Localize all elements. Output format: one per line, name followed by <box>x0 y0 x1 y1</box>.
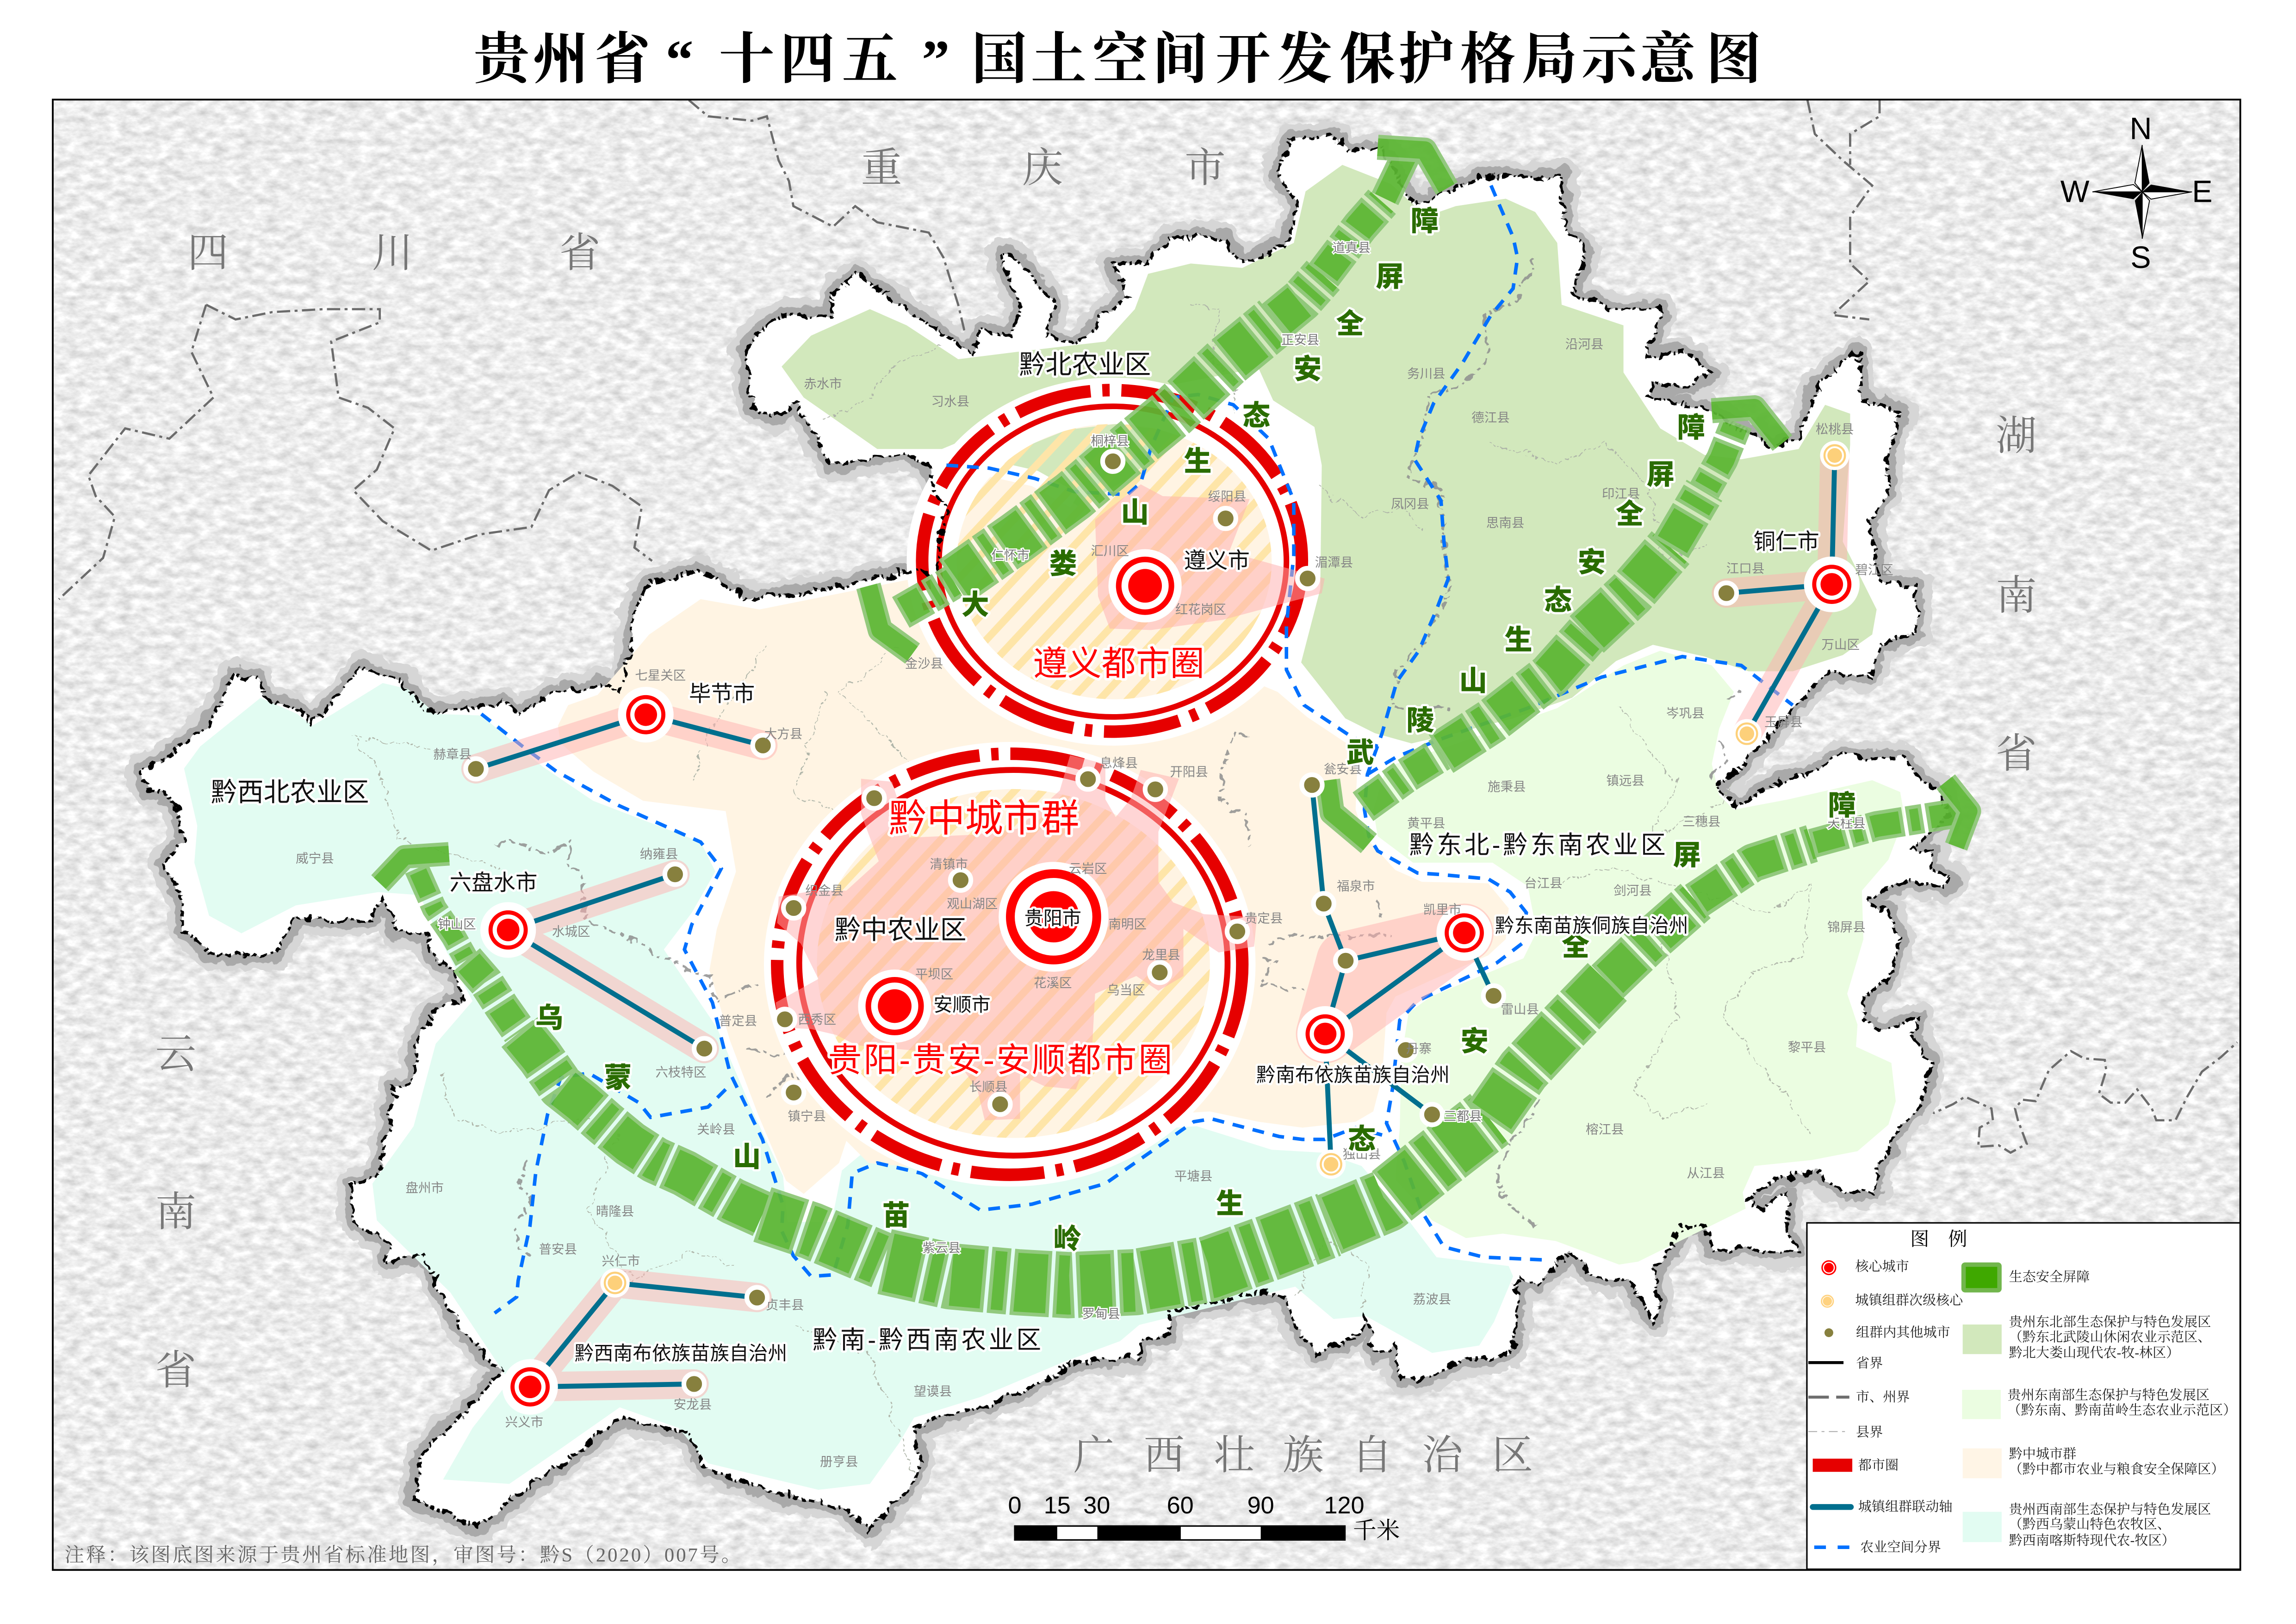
county name labels: 玉屏县 <box>1764 715 1803 729</box>
county name labels: 贞丰县 <box>766 1298 804 1312</box>
legend text: 市、州界 <box>1856 1389 1910 1405</box>
neighbouring province boundaries <box>59 100 2237 1153</box>
county labels over barrier bands: 正安县 <box>1281 333 1319 347</box>
legend text: 农业空间分界 <box>1860 1540 1941 1555</box>
urban cluster linkage halos <box>476 455 1835 1387</box>
county labels over barrier bands: 三都县 <box>1444 1109 1482 1123</box>
county name labels: 黄平县 <box>1407 816 1446 830</box>
barrier name characters: 山 <box>1121 497 1149 528</box>
county name labels: 思南县 <box>1486 516 1524 530</box>
county name labels: 瓮安县 <box>1324 762 1362 776</box>
region and city labels: 黔东南苗族侗族自治州 <box>1495 915 1688 936</box>
metropolitan circle labels: 贵阳-贵安-安顺都市圈 <box>828 1042 1172 1079</box>
county name labels: 兴义市 <box>505 1415 543 1429</box>
county name labels: 长顺县 <box>969 1079 1007 1094</box>
zone: southeast agricultural area <box>1373 651 1905 1264</box>
neighbouring province names: 重 <box>861 146 902 191</box>
county name labels: 兴仁市 <box>602 1254 640 1268</box>
neighbouring province names: 西 <box>1144 1433 1185 1478</box>
region and city labels: 黔南布依族苗族自治州 <box>1256 1064 1450 1086</box>
county name labels: 江口县 <box>1726 561 1764 575</box>
county name labels: 三穗县 <box>1682 815 1720 829</box>
county name labels: 红花岗区 <box>1175 602 1226 616</box>
county name labels: 大方县 <box>764 727 802 741</box>
neighbouring province names: 区 <box>1492 1433 1533 1478</box>
legend text: 核心城市 <box>1855 1259 1909 1274</box>
county name labels: 镇宁县 <box>788 1109 826 1123</box>
scale bar: 千米 <box>1353 1518 1400 1543</box>
county name labels: 德江县 <box>1471 410 1510 424</box>
barrier name characters: 安 <box>1461 1026 1489 1057</box>
source note: 注释：该图底图来源于贵州省标准地图，审图号：黔S（2020）007号。 <box>64 1544 741 1566</box>
barrier name characters: 岭 <box>1054 1224 1081 1255</box>
secondary core city markers <box>601 441 1849 1298</box>
region and city labels: 遵义市 <box>1184 548 1250 573</box>
barrier name characters: 屏 <box>1673 840 1701 871</box>
neighbouring province names: 自 <box>1352 1433 1392 1478</box>
compass <box>2060 112 2213 275</box>
legend text: （黔东北武陵山休闲农业示范区、 <box>2009 1330 2211 1345</box>
county name labels: 南明区 <box>1108 917 1147 931</box>
barrier name characters: 全 <box>1336 308 1364 339</box>
county name labels: 独山县 <box>1343 1147 1381 1161</box>
neighbouring province names: 治 <box>1422 1433 1464 1478</box>
region and city labels: 六盘水市 <box>450 871 537 896</box>
barrier name characters: 态 <box>1544 585 1572 616</box>
region and city labels: 铜仁市 <box>1753 529 1819 554</box>
neighbouring province names: 省 <box>1996 732 2037 777</box>
scale bar: 90 <box>1247 1492 1274 1519</box>
region and city labels: 安顺市 <box>933 994 991 1015</box>
metropolitan circle labels <box>828 644 1204 1079</box>
compass: W <box>2060 175 2090 209</box>
province border dash-dot line <box>141 134 1953 1531</box>
agricultural space dividing lines <box>481 186 1793 1313</box>
county name labels: 从江县 <box>1687 1166 1725 1180</box>
county name labels: 荔波县 <box>1413 1292 1451 1306</box>
scale bar: 60 <box>1167 1492 1194 1519</box>
legend text: 贵州东北部生态保护与特色发展区 <box>2009 1314 2211 1330</box>
legend text: （黔中都市农业与粮食安全保障区） <box>2009 1462 2224 1477</box>
legend text: 城镇组群联动轴 <box>1858 1499 1953 1514</box>
legend text: （黔东南、黔南苗岭生态农业示范区） <box>2008 1402 2236 1418</box>
barrier name characters <box>535 205 1856 1255</box>
barrier name characters: 屏 <box>1376 261 1403 292</box>
scale bar: 30 <box>1083 1492 1110 1519</box>
county name labels: 盘州市 <box>406 1181 444 1195</box>
neighbouring province names: 四 <box>187 230 229 276</box>
county name labels: 云岩区 <box>1069 861 1107 876</box>
legend text: 都市圈 <box>1858 1457 1899 1473</box>
barrier name characters: 屏 <box>1646 459 1675 490</box>
neighbouring province names <box>155 146 2037 1478</box>
legend text: 组群内其他城市 <box>1856 1325 1950 1340</box>
scale bar: 0 <box>1008 1492 1022 1519</box>
region and city labels: 黔西南布依族苗族自治州 <box>575 1342 787 1364</box>
barrier name characters: 蒙 <box>604 1062 632 1093</box>
county name labels: 织金县 <box>805 883 844 897</box>
county name labels: 威宁县 <box>296 851 334 865</box>
county name labels: 平塘县 <box>1174 1169 1212 1183</box>
barrier name characters: 态 <box>1348 1124 1376 1155</box>
county name labels: 乌当区 <box>1107 983 1145 997</box>
legend text: 黔中城市群 <box>2009 1446 2076 1462</box>
barrier name characters: 全 <box>1616 498 1644 529</box>
neighbouring province names: 省 <box>559 230 601 276</box>
legend text <box>1855 1259 2236 1555</box>
barrier name characters: 生 <box>1505 624 1533 655</box>
county name labels: 开阳县 <box>1170 765 1208 779</box>
county name labels: 碧江区 <box>1855 562 1893 577</box>
urban cluster pink patches <box>776 485 1325 1120</box>
county name labels: 福泉市 <box>1337 879 1375 893</box>
neighbouring province names: 湖 <box>1996 414 2037 459</box>
county name labels: 息烽县 <box>1099 756 1138 770</box>
legend text: 贵州东南部生态保护与特色发展区 <box>2008 1388 2209 1403</box>
county name labels: 六枝特区 <box>656 1065 707 1079</box>
region and city labels <box>211 350 1819 1364</box>
county name labels: 望谟县 <box>914 1384 952 1399</box>
neighbouring province names: 市 <box>1185 146 1226 191</box>
county name labels: 晴隆县 <box>596 1204 634 1218</box>
barrier name characters: 生 <box>1216 1188 1244 1220</box>
county name labels: 汇川区 <box>1091 543 1129 558</box>
county name labels: 务川县 <box>1407 366 1446 380</box>
county name labels: 万山区 <box>1821 637 1860 652</box>
Zunyi metropolitan circle <box>907 378 1378 747</box>
zone: central urban agglomeration area <box>558 579 1508 1194</box>
county name labels: 凯里市 <box>1423 902 1461 917</box>
scale bar: 15 <box>1044 1492 1071 1519</box>
legend title <box>1910 1228 1967 1250</box>
legend text: 黔北大娄山现代农-牧-林区） <box>2009 1345 2179 1360</box>
core city markers <box>480 549 1860 1415</box>
barrier name characters: 山 <box>733 1141 761 1172</box>
county name labels: 普安县 <box>539 1242 577 1257</box>
county name labels: 印江县 <box>1602 486 1640 501</box>
county name labels: 关岭县 <box>697 1122 735 1136</box>
urban cluster linkage axes <box>476 455 1835 1387</box>
zone: southwest agricultural area <box>184 683 1513 1490</box>
county city markers <box>465 451 1737 1394</box>
county name labels: 习水县 <box>931 394 969 409</box>
legend text: 贵州西南部生态保护与特色发展区 <box>2009 1502 2211 1517</box>
region and city labels: 黔北农业区 <box>1019 350 1151 380</box>
county name labels: 清镇市 <box>930 857 968 871</box>
neighbouring province names: 族 <box>1283 1433 1324 1478</box>
county name labels: 平坝区 <box>915 967 953 981</box>
metropolitan circle labels: 遵义都市圈 <box>1033 644 1204 683</box>
barrier name characters: 障 <box>1411 205 1439 236</box>
county labels over barrier bands: 紫云县 <box>923 1241 961 1255</box>
barrier name characters: 山 <box>1459 666 1487 697</box>
county name labels: 纳雍县 <box>640 846 678 861</box>
barrier name characters: 乌 <box>535 1002 563 1033</box>
metropolitan circle labels: 黔中城市群 <box>889 797 1079 840</box>
legend text: 县界 <box>1856 1425 1883 1440</box>
legend symbols <box>1808 1261 2002 1547</box>
county name labels: 榕江县 <box>1586 1122 1624 1136</box>
barrier name characters: 娄 <box>1049 548 1077 579</box>
legend text: 生态安全屏障 <box>2009 1269 2090 1284</box>
zone: northeast agricultural area <box>782 165 1877 743</box>
county labels over barrier bands <box>438 240 1866 1321</box>
Guiyang-Guian-Anshun metropolitan circle <box>764 742 1255 1187</box>
Guizhou province halo and fill <box>141 134 1953 1531</box>
county name labels: 安龙县 <box>674 1397 712 1412</box>
county name labels: 凤冈县 <box>1391 497 1429 511</box>
neighbouring province names: 广 <box>1074 1433 1114 1478</box>
county name labels: 七星关区 <box>635 668 686 682</box>
county name labels: 松桃县 <box>1816 422 1854 436</box>
county name labels: 黎平县 <box>1788 1040 1826 1054</box>
county name labels: 台江县 <box>1524 876 1563 890</box>
barrier name characters: 武 <box>1347 737 1374 768</box>
barrier name characters: 安 <box>1578 547 1606 578</box>
county name labels: 岑巩县 <box>1666 706 1705 721</box>
neighbouring province names: 庆 <box>1022 146 1063 191</box>
region and city labels: 黔南-黔西南农业区 <box>813 1326 1041 1354</box>
neighbouring province names: 南 <box>1996 573 2037 619</box>
compass: S <box>2130 241 2151 275</box>
county labels over barrier bands: 天柱县 <box>1827 816 1866 830</box>
region and city labels: 毕节市 <box>689 682 755 706</box>
region and city labels: 贵阳市 <box>1024 908 1081 929</box>
neighbouring province names: 壮 <box>1214 1433 1255 1478</box>
barrier name characters: 安 <box>1294 354 1322 385</box>
county name labels: 剑河县 <box>1613 883 1652 897</box>
ecological security barriers <box>380 147 1969 1285</box>
barrier name characters: 生 <box>1184 446 1212 477</box>
county name labels: 施秉县 <box>1488 779 1526 794</box>
county name labels: 贵定县 <box>1245 911 1283 926</box>
neighbouring province names: 省 <box>155 1348 196 1394</box>
county labels over barrier bands: 罗甸县 <box>1082 1307 1120 1321</box>
county labels over barrier bands: 仁怀市 <box>991 548 1030 562</box>
county labels over barrier bands: 桐梓县 <box>1091 434 1129 448</box>
county name labels: 丹寨 <box>1406 1041 1432 1056</box>
legend title: 图 <box>1910 1228 1929 1250</box>
legend text: 城镇组群次级核心 <box>1855 1293 1964 1308</box>
scale bar <box>1008 1492 1400 1543</box>
county name labels: 雷山县 <box>1501 1002 1539 1016</box>
legend text: 省界 <box>1856 1356 1883 1371</box>
title: 贵州省“十四五”国土空间开发保护格局示意图 <box>474 29 1762 91</box>
county name labels: 绥阳县 <box>1208 489 1246 504</box>
county name labels: 赤水市 <box>804 377 842 391</box>
county name labels: 册亨县 <box>820 1455 858 1469</box>
legend text: 黔西南喀斯特现代农-牧区） <box>2009 1533 2175 1548</box>
county name labels: 锦屏县 <box>1827 920 1866 934</box>
barrier name characters: 全 <box>1562 931 1589 962</box>
barrier name characters: 态 <box>1242 400 1270 431</box>
region and city labels: 黔中农业区 <box>835 915 967 945</box>
county name labels: 沿河县 <box>1565 337 1603 351</box>
county labels over barrier bands: 钟山区 <box>438 917 476 931</box>
neighbouring province names: 南 <box>155 1190 196 1235</box>
barrier: Wumeng-Miaoling mountains <box>380 782 1969 1285</box>
compass: E <box>2192 175 2213 209</box>
barrier name characters: 大 <box>962 589 989 620</box>
legend panel <box>1807 1223 2240 1569</box>
neighbouring province names: 川 <box>372 230 413 276</box>
county name labels: 镇远县 <box>1606 773 1644 788</box>
county name labels: 湄潭县 <box>1315 555 1353 570</box>
county name labels: 水城区 <box>552 924 590 939</box>
barrier name characters: 苗 <box>882 1200 910 1231</box>
neighbouring province names: 云 <box>155 1032 196 1077</box>
barrier name characters: 陵 <box>1407 705 1434 736</box>
legend title: 例 <box>1948 1228 1967 1250</box>
region and city labels: 黔西北农业区 <box>211 778 369 807</box>
scale bar: 120 <box>1324 1492 1365 1519</box>
county name labels: 观山湖区 <box>947 896 998 911</box>
county labels over barrier bands: 道真县 <box>1333 240 1371 255</box>
barrier name characters: 障 <box>1677 412 1705 443</box>
county name labels: 普定县 <box>719 1014 757 1028</box>
barrier: Wuling mountains <box>1328 408 1782 844</box>
county name labels: 金沙县 <box>905 656 943 671</box>
barrier: Dalou mountains <box>869 147 1447 653</box>
county and prefecture boundaries <box>354 256 1811 1472</box>
county name labels: 龙里县 <box>1142 948 1180 962</box>
county name labels: 花溪区 <box>1034 976 1072 990</box>
barrier name characters: 障 <box>1828 790 1856 821</box>
compass: N <box>2129 112 2152 146</box>
county name labels <box>296 337 1893 1469</box>
county name labels: 赫章县 <box>434 747 472 761</box>
region and city labels: 黔东北-黔东南农业区 <box>1409 831 1666 859</box>
legend text: （黔西乌蒙山特色农牧区、 <box>2009 1517 2171 1532</box>
county name labels: 西秀区 <box>798 1012 836 1027</box>
